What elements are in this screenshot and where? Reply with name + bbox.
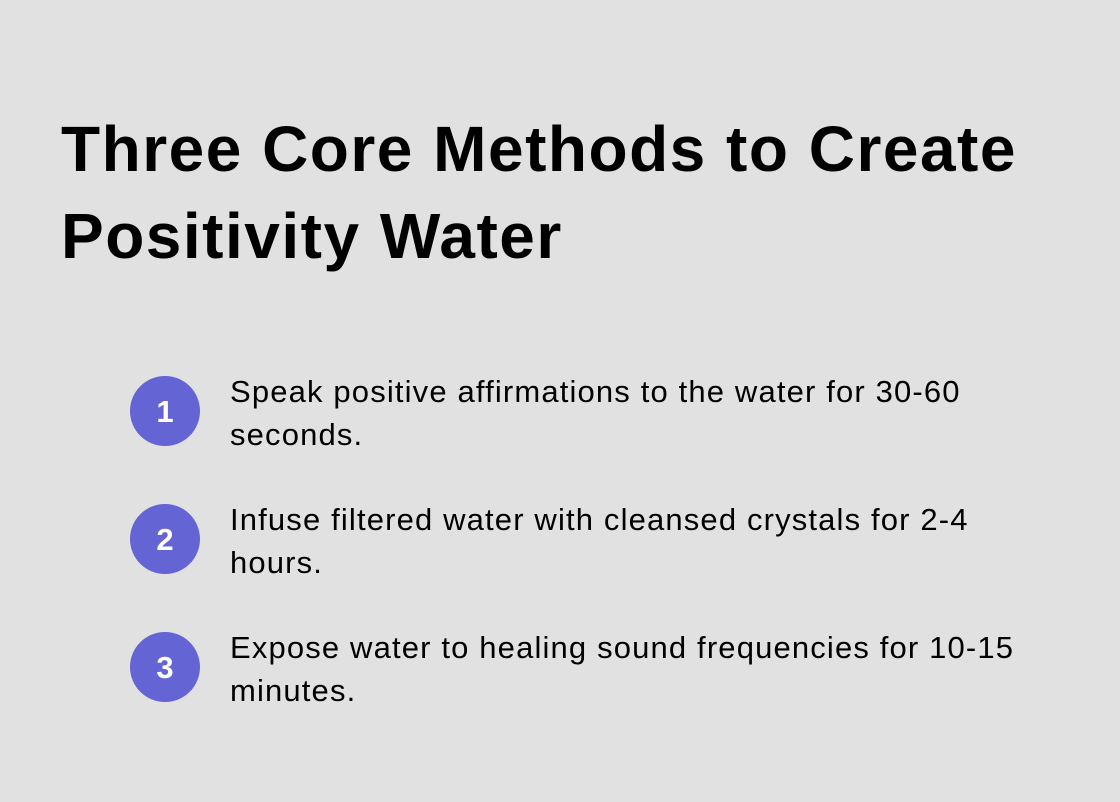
item 2 xyxy=(130,502,969,580)
text: step 3 xyxy=(230,630,1014,708)
icon: number 3: 3 xyxy=(156,650,174,685)
text: step 1 xyxy=(230,374,961,452)
title: Positivity Water xyxy=(61,200,563,272)
icon: number 1: 1 xyxy=(156,394,174,429)
icon: number 3 xyxy=(130,632,200,702)
title: Three Core Methods to Create xyxy=(61,113,1017,185)
text: step 2: hours. xyxy=(230,545,323,580)
icon: number 1 xyxy=(130,376,200,446)
text: step 2: Infuse filtered water with cleansed crystals for 2-4 xyxy=(230,502,969,537)
icon: number 2: 2 xyxy=(156,522,174,557)
text: step 1: Speak positive affirmations to the water for 30-60 xyxy=(230,374,961,409)
item 3 xyxy=(130,630,1014,708)
text: step 1: seconds. xyxy=(230,417,363,452)
text: step 3: minutes. xyxy=(230,673,356,708)
title xyxy=(61,113,1017,272)
text: step 2 xyxy=(230,502,969,580)
icon: number 2 xyxy=(130,504,200,574)
text: step 3: Expose water to healing sound frequencies for 10-15 xyxy=(230,630,1014,665)
item 1 xyxy=(130,374,961,452)
